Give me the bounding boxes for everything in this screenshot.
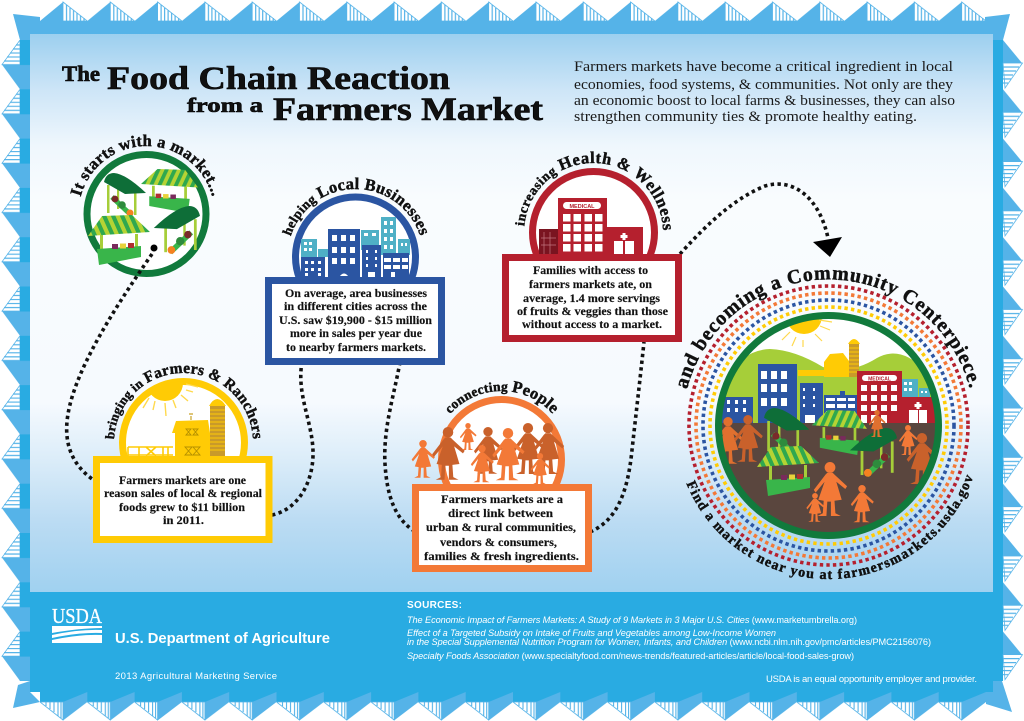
callout text: U.S. saw $19,900 - $15 million: [279, 313, 432, 327]
callout box: [416, 488, 588, 568]
callout text: urban & rural communities,: [426, 520, 576, 534]
callout text: of fruits & veggies than those: [517, 304, 669, 318]
panel: health and wellness: [502, 151, 682, 342]
copyright line: 2013 Agricultural Marketing Service: [115, 671, 277, 682]
callout text: average, 1.4 more servings: [523, 291, 660, 305]
panel: sky background: [30, 34, 993, 592]
callout text: Farmers markets are a: [441, 492, 563, 506]
icon: farm: [127, 384, 226, 456]
callout text: [279, 286, 432, 354]
intro text: an economic boost to local farms & businesses, they can also: [574, 93, 955, 109]
callout text: [424, 492, 579, 563]
callout text: foods grew to $11 billion: [119, 500, 245, 514]
title: The: [62, 61, 100, 86]
illustration: market town scene: MEDICAL: [868, 376, 891, 382]
callout text: in 2011.: [163, 513, 204, 527]
usda logo: [52, 604, 103, 643]
callout text: without access to a market.: [522, 317, 662, 331]
callout text: On average, area businesses: [285, 286, 427, 300]
intro text: strengthen community ties & promote healthy eating.: [574, 109, 917, 125]
sources: [407, 600, 931, 661]
panel: farmers and ranchers: [93, 366, 272, 543]
panel: market circle: [70, 134, 216, 277]
green ring: [718, 316, 938, 536]
curved caption: find a market: Find a market near you at farmersmarkets.usda.gov: [686, 474, 972, 580]
title: Farmers Market: [273, 92, 543, 128]
dotted path: health to centerpiece: [680, 184, 828, 254]
icon: market stalls: [88, 169, 200, 265]
agency name: U.S. Department of Agriculture: [115, 630, 330, 647]
panel: local businesses: [265, 177, 445, 365]
panel: connecting people: [412, 380, 592, 572]
callout text: to nearby farmers markets.: [286, 340, 426, 354]
title: [62, 61, 543, 128]
dotted path: market to farmers: [67, 254, 152, 484]
callout text: Farmers markets are one: [119, 473, 247, 487]
callout text: direct link between: [448, 506, 553, 520]
curved heading: becoming a community centerpiece: and becoming a Community Centerpiece.: [678, 270, 976, 388]
curved heading: bringing in farmers: bringing in Farmers & Ranchers: [104, 366, 260, 439]
icon: hospital: [539, 198, 643, 255]
usda logo: USDA: [52, 604, 103, 628]
curved heading: it starts with a market: It starts with a market...: [70, 134, 216, 197]
title: from a: [187, 93, 264, 117]
intro text: economies, food systems, & communities. Not only are they: [574, 77, 954, 93]
callout text: families & fresh ingredients.: [424, 549, 579, 563]
arrow head: [813, 237, 842, 257]
sources: Effect of a Targeted Subsidy on Intake of Fruits and Vegetables among Low-Income Women: [407, 628, 776, 638]
intro text: [574, 59, 955, 125]
panel: community centerpiece: [678, 270, 976, 580]
callout box: [268, 280, 442, 362]
dotted path: farmers to businesses: [272, 362, 313, 515]
icon: city skyline: [301, 217, 410, 279]
illustration: market town scene: [722, 319, 935, 532]
icon: people: [412, 423, 564, 484]
callout text: [104, 473, 263, 527]
icon: hospital: MEDICAL: [569, 204, 595, 210]
sources: The Economic Impact of Farmers Markets: A Study of 9 Markets in 3 Major U.S. Cities (www.marketumbrella.org): [407, 615, 857, 625]
callout text: more in sales per year due: [290, 326, 423, 340]
dotted rings: [689, 286, 968, 565]
start dot: [150, 244, 158, 252]
equal opportunity statement: USDA is an equal opportunity employer and provider.: [766, 674, 977, 685]
callout text: vendors & consumers,: [440, 535, 557, 549]
sources: in the Special Supplemental Nutrition Program for Women, Infants, and Children (www.ncbi.nlm.nih.gov/pmc/articles/PMC2156076): [407, 637, 931, 647]
callout text: [517, 263, 669, 331]
sources: SOURCES:: [407, 600, 462, 611]
dotted path: businesses to people: [385, 362, 416, 532]
callout text: farmers markets ate, on: [529, 277, 652, 291]
curved heading: connecting people: connecting People: [446, 380, 558, 414]
panel: footer band: [30, 592, 993, 692]
callout box: [506, 258, 678, 338]
callout box: [96, 460, 269, 540]
dotted path: people to health: [590, 342, 644, 532]
intro text: Farmers markets have become a critical ingredient in local: [574, 59, 953, 75]
callout text: reason sales of local & regional: [104, 486, 263, 500]
sources: Specialty Foods Association (www.specialtyfood.com/news-trends/featured-articles/article/local-food-sales-grow): [407, 651, 854, 661]
curved heading: increasing health: increasing Health & Wellness: [515, 151, 671, 230]
callout text: in different cities across the: [284, 299, 428, 313]
callout text: Families with access to: [533, 263, 648, 277]
title: Food Chain Reaction: [107, 61, 450, 97]
curved heading: helping local businesses: helping Local Businesses: [282, 177, 428, 236]
